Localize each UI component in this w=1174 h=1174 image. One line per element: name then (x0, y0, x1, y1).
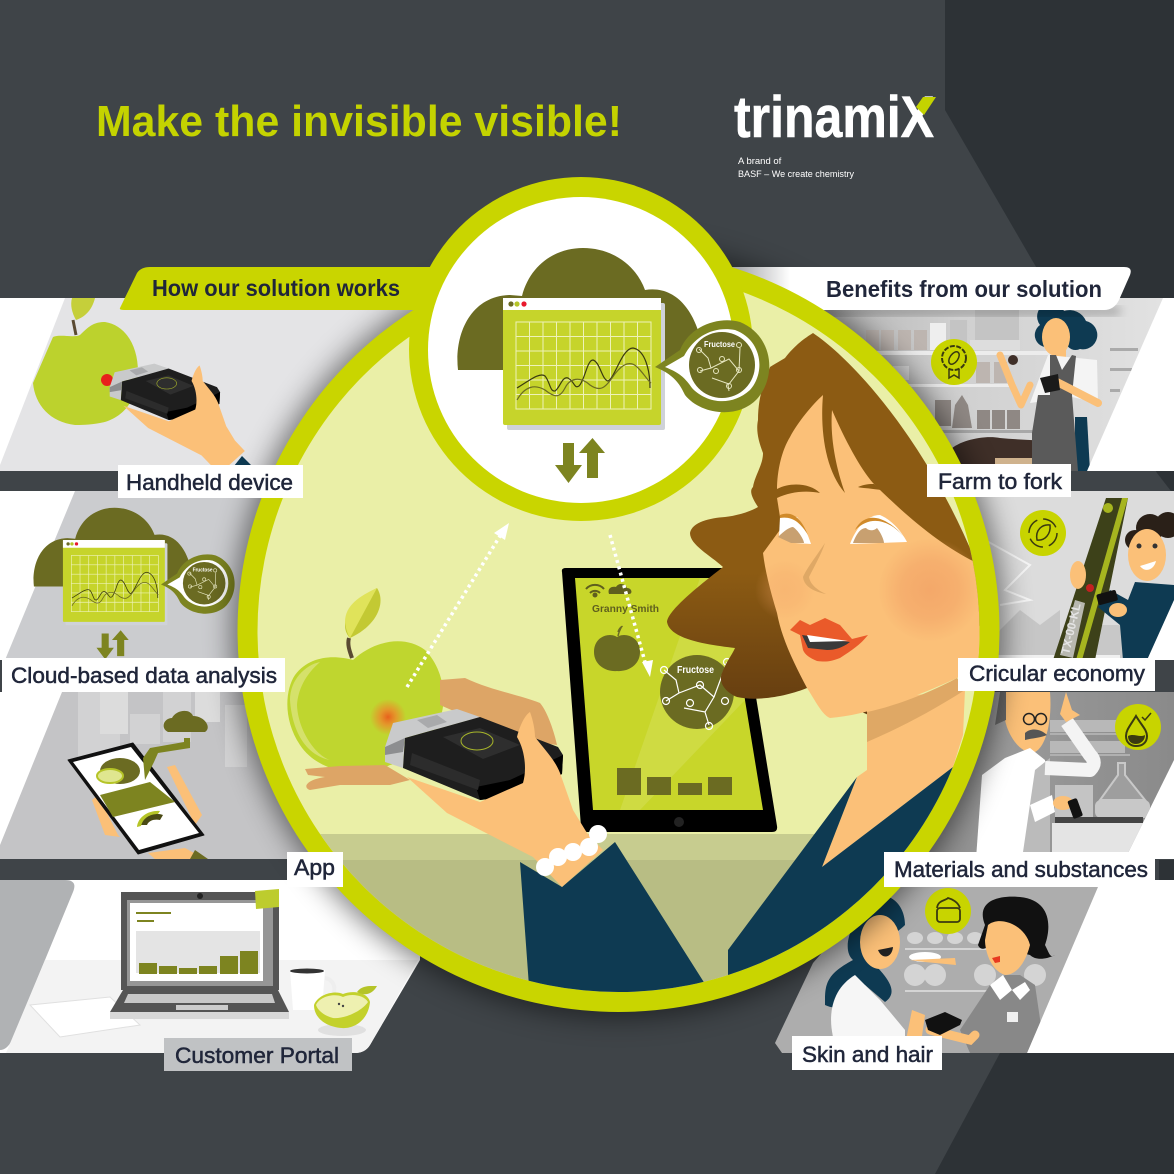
eyebrows (777, 484, 881, 498)
icon: cream jar (925, 888, 971, 934)
main circle (238, 250, 1005, 1012)
title: Make the invisible visible! (96, 97, 622, 146)
wiper blade part (1053, 498, 1128, 660)
brand subline: A brand of (738, 156, 782, 167)
label: Materials and substances: Materials and substances (894, 857, 1148, 882)
panel: circular economy scene (975, 491, 1174, 660)
logo: trinamiX: trinamiX (734, 85, 934, 150)
cloud, chart window and fructose bubble (457, 248, 769, 483)
shelves with coffee products (860, 310, 1138, 433)
panel: app scene (0, 692, 308, 859)
label: Skin and hair (792, 1036, 942, 1070)
label: Skin and hair: Skin and hair (802, 1042, 933, 1067)
icon: coffee cup (290, 968, 334, 1010)
hand with spectrometer device (110, 364, 245, 474)
brand subline (738, 156, 854, 180)
recycling material backdrop (985, 540, 1125, 660)
heading band: Benefits from our solution (730, 267, 1131, 310)
icon: cloud (609, 584, 631, 594)
wiper blade part: TX-00-KL (1058, 602, 1084, 656)
spectrometer device with holding hand (385, 709, 603, 887)
sleeve cuff (234, 456, 251, 465)
heading band: How our solution works (120, 267, 440, 310)
heading text: How our solution works: How our solution works (152, 275, 400, 301)
bar chart on tablet (617, 768, 732, 795)
icon: apple half (314, 986, 377, 1036)
pearl bracelet (536, 825, 607, 876)
shadow under benefits band (780, 308, 1120, 314)
tablet (562, 568, 777, 832)
woman's face (763, 395, 980, 718)
dotted arrow: device to cloud (407, 523, 509, 687)
icon: smartphone with app screen (68, 743, 204, 854)
dark marker next to materials label (1159, 860, 1174, 880)
label: Cricular economy: Cricular economy (969, 661, 1145, 686)
icon: oil drop with check (1115, 704, 1161, 750)
label: App: App (294, 855, 335, 880)
label: Customer Portal: Customer Portal (175, 1043, 339, 1068)
icon: cloud window with chart and arrows (34, 508, 235, 659)
icon: cloud with connection arrow (143, 711, 208, 780)
icon: apple with stem and leaf (33, 298, 138, 425)
top circle: cloud analysis (409, 177, 769, 521)
cheek blush (760, 544, 970, 630)
tablet label: variety name: Granny Smith (592, 604, 659, 615)
darker geometric background, top right (945, 0, 1174, 495)
icon: laptop with bar chart (110, 889, 289, 1019)
label: Handheld device (118, 465, 303, 498)
back hand supporting apple (305, 678, 557, 790)
label: Cloud-based data analysis (2, 658, 285, 692)
city skyline (78, 692, 247, 770)
label: Cricular economy (958, 658, 1155, 691)
lab shelves and flask (1050, 720, 1150, 859)
main circle shadow (232, 245, 1004, 1017)
panel: cloud analysis scene (0, 491, 520, 660)
icon: quality badge (931, 339, 977, 385)
darker geometric background, bottom right (935, 1053, 1174, 1174)
dotted arrow: cloud to tablet (610, 535, 653, 677)
coffee beans heap (952, 437, 1032, 464)
lips (790, 618, 868, 662)
label: Cloud-based data analysis: Cloud-based data analysis (11, 663, 277, 688)
panel: materials and substances scene (929, 692, 1174, 859)
neck shadow (867, 678, 965, 742)
barista figure (1000, 303, 1098, 471)
fructose molecule: Fructose (677, 665, 714, 676)
woman in grey uniform (925, 897, 1055, 1053)
nose (803, 543, 826, 594)
woman in lab coat (825, 898, 956, 1036)
heading text: Benefits from our solution: Benefits from our solution (826, 276, 1102, 302)
woman's jacket (728, 740, 1000, 1000)
woman's hair (667, 333, 1000, 720)
icon: apple silhouette (594, 627, 640, 671)
jacket sleeve (520, 842, 712, 1000)
brand subline: BASF – We create chemistry (738, 169, 854, 180)
label: Farm to fork (927, 464, 1071, 497)
hand behind phone (92, 765, 205, 859)
floor (320, 834, 917, 992)
icon: wifi (586, 585, 604, 596)
label: Handheld device: Handheld device (126, 470, 293, 495)
label: Farm to fork: Farm to fork (938, 469, 1063, 494)
label: Materials and substances (884, 852, 1155, 887)
panel: skin and hair scene (775, 880, 1174, 1053)
eyes (778, 514, 907, 544)
papers (30, 997, 140, 1037)
panel: handheld device scene (0, 298, 414, 471)
shelf with jars (904, 932, 1046, 992)
woman's neck (822, 690, 965, 867)
scientist figure (976, 692, 1094, 859)
apple with stem and leaf (287, 588, 444, 772)
man with device (1070, 512, 1174, 660)
fructose molecule (660, 655, 734, 730)
icon: recycling leaf (1020, 510, 1066, 556)
panel: farm to fork scene (824, 298, 1174, 471)
label: Customer Portal (164, 1038, 352, 1071)
panel: customer portal scene (0, 880, 420, 1053)
label: App (287, 852, 343, 887)
